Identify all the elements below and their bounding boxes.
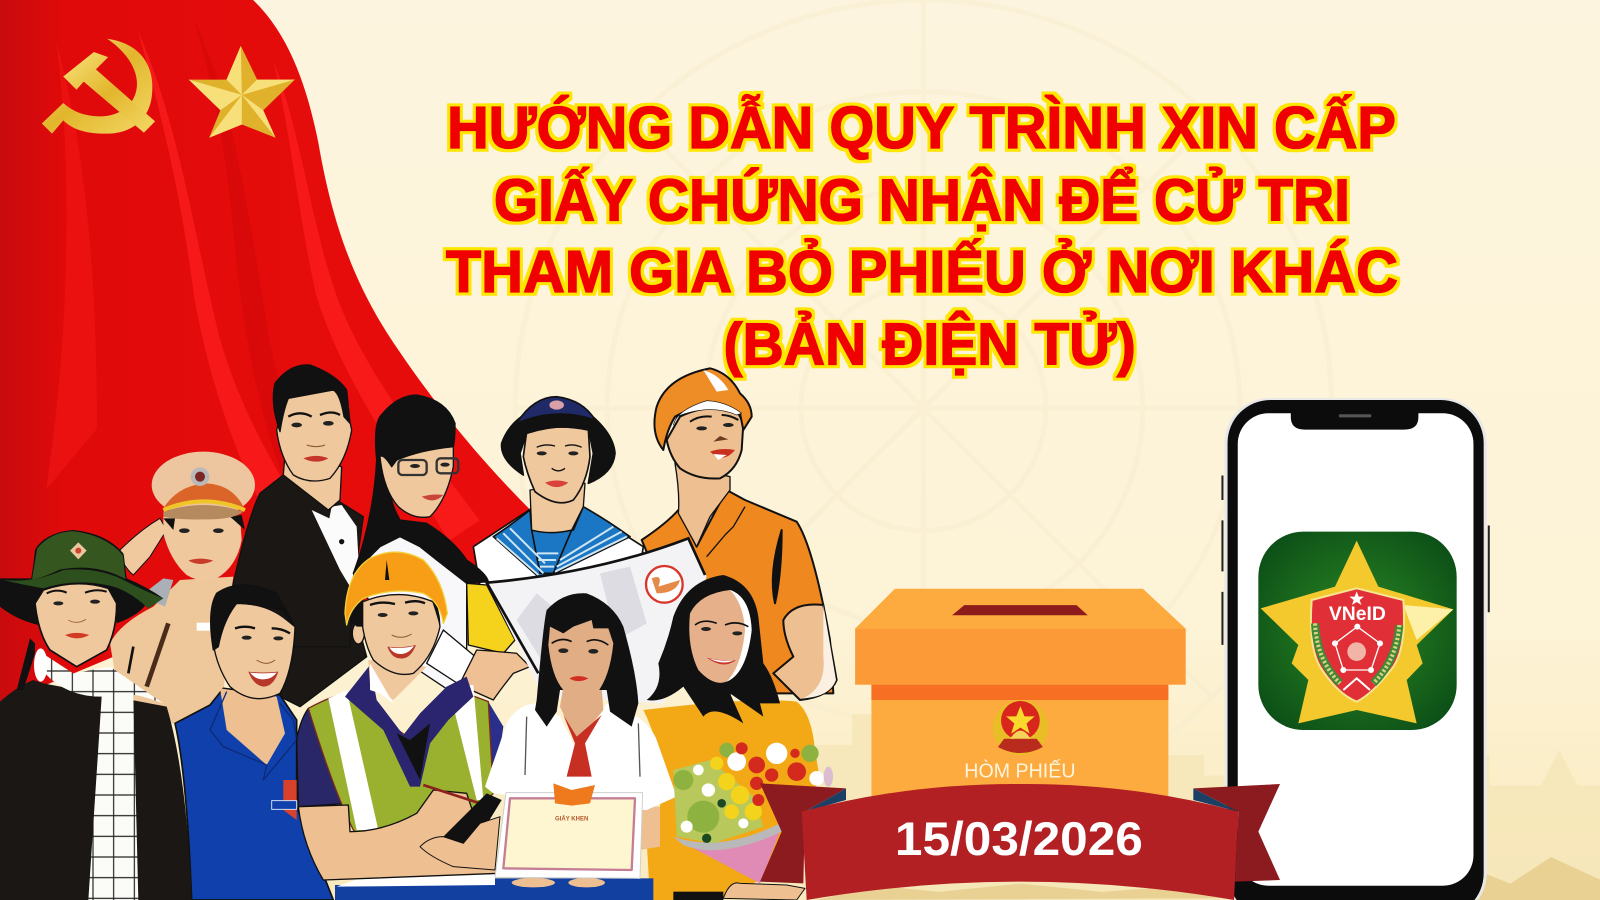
ribbon right tail [1193,784,1280,882]
flower bouquet [673,742,833,883]
figure: woman in yellow shirt [643,575,820,900]
figure: soldier with green hat and scarf [0,530,192,900]
icon: VNeID app [1258,532,1457,730]
phone [1222,398,1489,900]
ballot box label: HÒM PHIẾU [964,760,1076,783]
figure: sailor [473,397,643,587]
title: THAM GIA BỎ PHIẾU Ở NƠI KHÁC [446,238,1398,305]
ballot box [855,589,1186,863]
icon: VNeID app: VNeID [1329,604,1386,625]
ribbon left tail [760,783,846,883]
figure: woman with glasses [353,395,530,700]
date text: 15/03/2026 [895,813,1143,865]
phone notch [1291,412,1418,430]
title: (BẢN ĐIỆN TỬ) [723,310,1136,377]
title [446,94,1398,377]
figure: police officer saluting [110,452,255,723]
certificate [495,783,643,887]
icon: hammer and sickle [42,39,155,134]
white banner with logo [487,538,707,703]
red flag [0,0,536,704]
date ribbon [760,783,1280,900]
figure: schoolgirl [485,593,677,900]
icon: national emblem [993,700,1048,755]
certificate: GIẤY KHEN [555,816,588,823]
ribbon main band [802,784,1238,900]
title: GIẤY CHỨNG NHẬN ĐỂ CỬ TRI [494,166,1350,233]
figure: man in blue shirt [175,585,333,900]
figure: worker in yellow helmet and vest [297,552,503,900]
figure: worker in orange helmet [642,368,837,700]
title: HƯỚNG DẪN QUY TRÌNH XIN CẤP [447,94,1396,161]
icon: gold star [189,46,295,138]
figure: businessman in black suit [220,365,367,707]
